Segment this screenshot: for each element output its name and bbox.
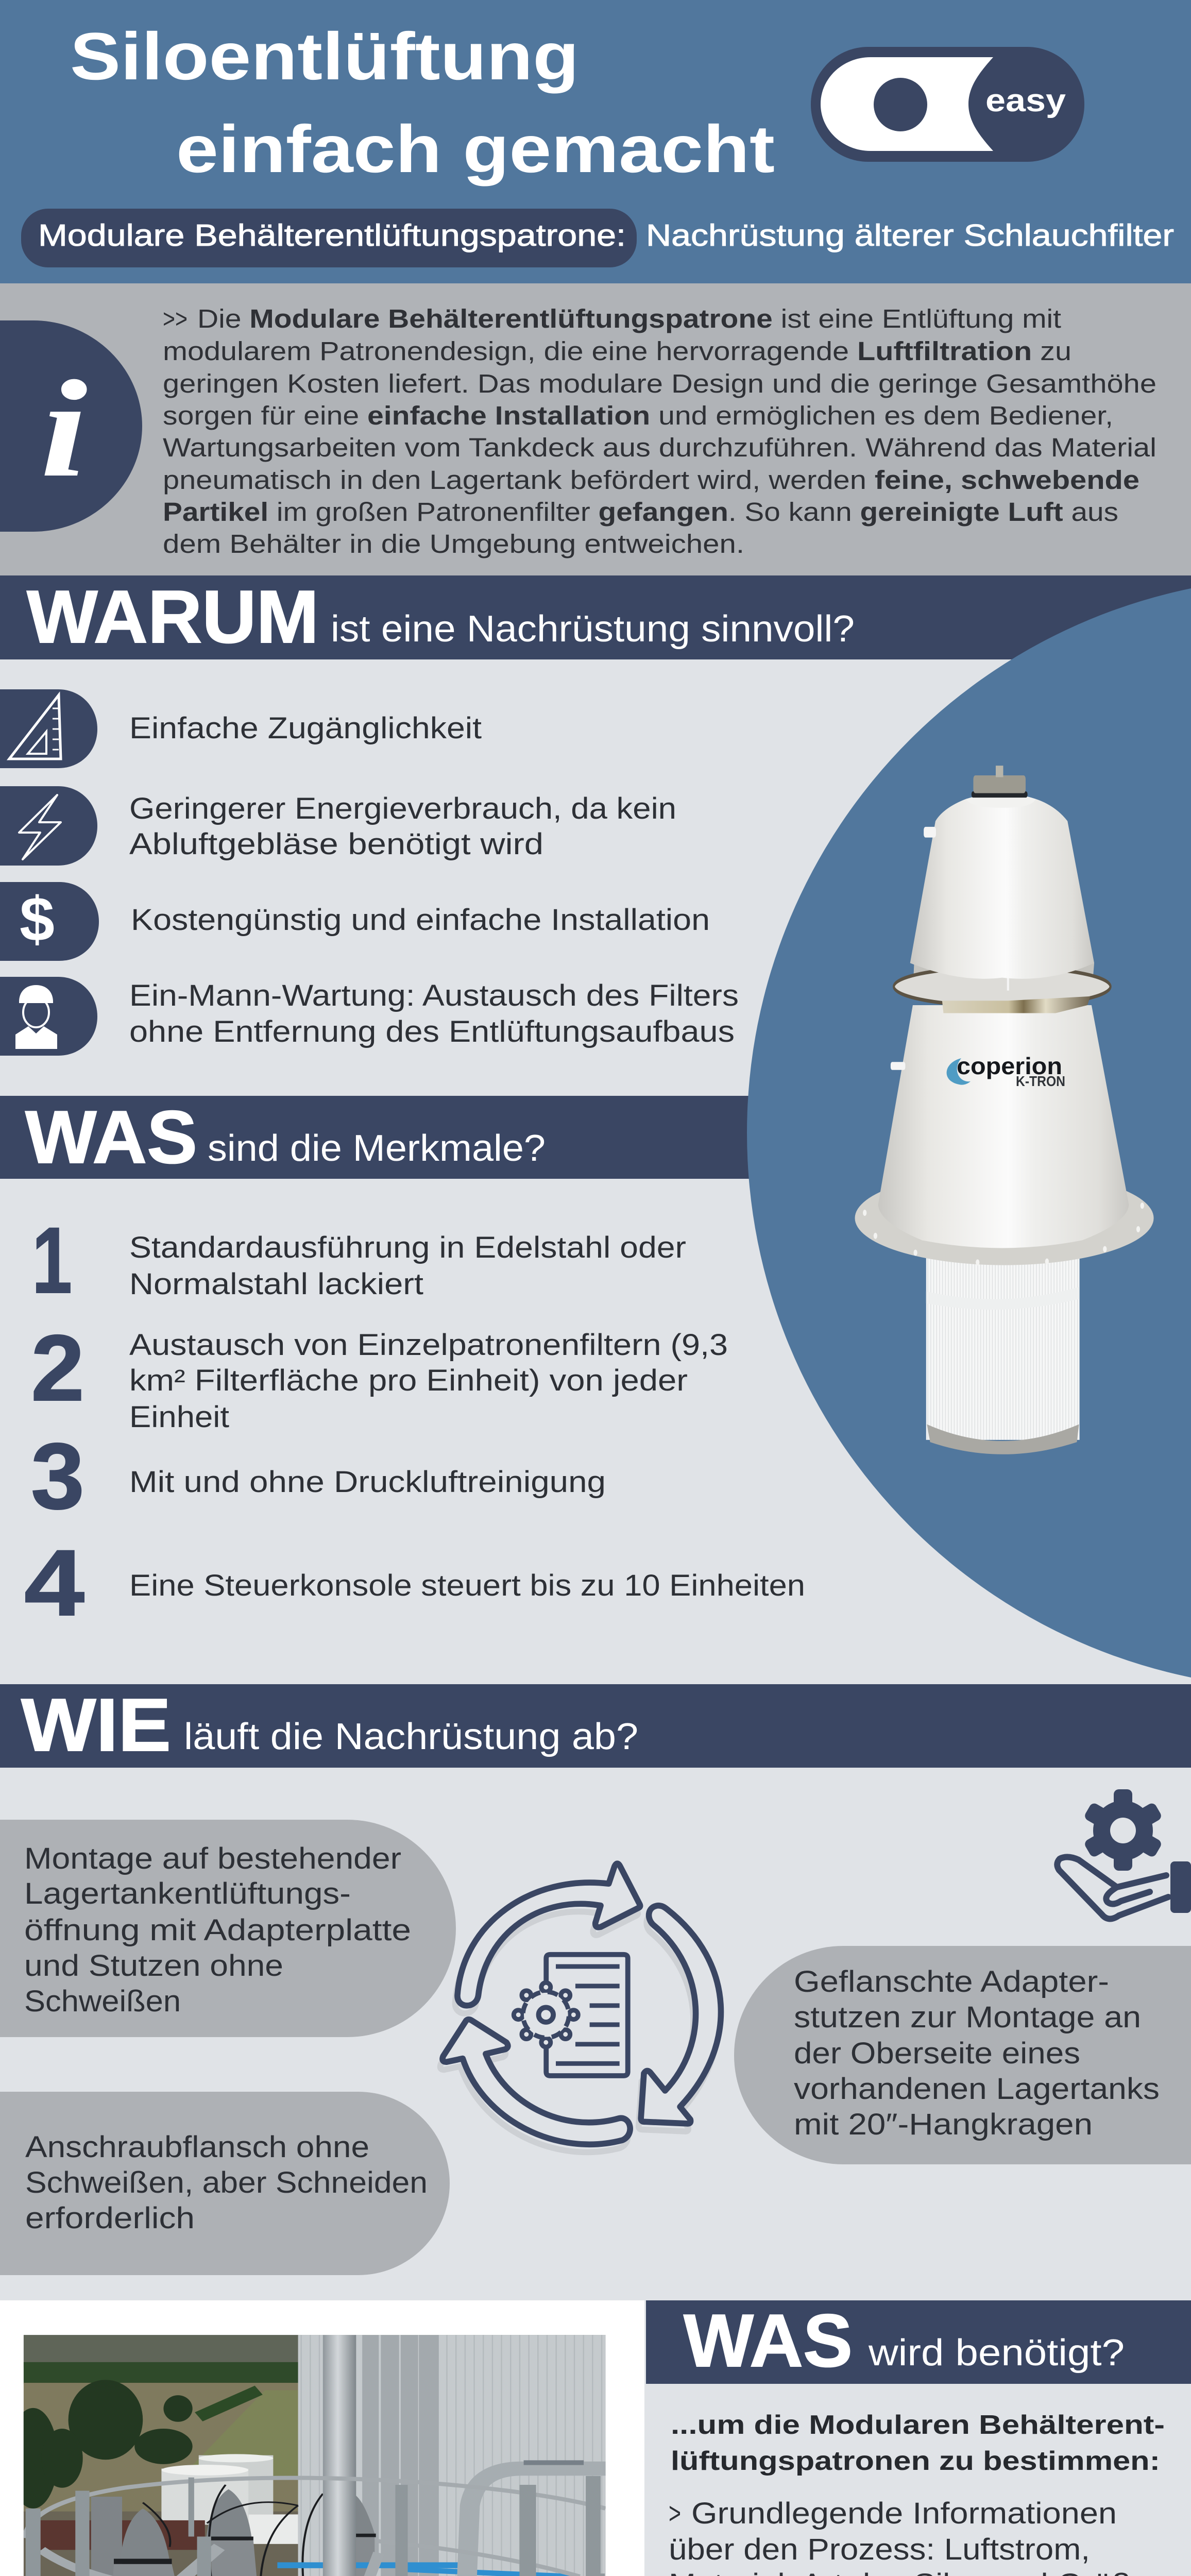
title bbox=[70, 19, 775, 187]
feature 3 bbox=[31, 1423, 606, 1529]
icon: product vent unit bbox=[855, 766, 1154, 1454]
panel: warum item 4 bbox=[0, 977, 97, 1056]
icon: easy toggle: easy bbox=[985, 83, 1066, 118]
callout: montage bbox=[0, 1820, 456, 2037]
callout: anschraubflansch bbox=[0, 2092, 450, 2275]
feature 1 bbox=[32, 1208, 686, 1313]
panel: intro background bbox=[0, 283, 1191, 576]
heading: was merkmale bbox=[0, 1095, 773, 1179]
text: warum item 4: ohne Entfernung des Entlüftungsaufbaus bbox=[129, 1015, 735, 1048]
callout: montage: Montage auf bestehender bbox=[24, 1842, 401, 1875]
text: warum item 1: Einfache Zugänglichkeit bbox=[129, 711, 482, 745]
title: einfach gemacht bbox=[176, 111, 775, 187]
callout: anschraubflansch: erforderlich bbox=[25, 2201, 195, 2235]
text block: intro: geringen Kosten liefert. Das modulare Design und die geringe Gesamthöhe bbox=[163, 369, 1156, 398]
panel: light content background bbox=[0, 575, 1191, 2302]
feature 1: Standardausführung in Edelstahl oder bbox=[129, 1231, 686, 1264]
subtitle: Modulare Behälterentlüftungspatrone: bbox=[38, 218, 626, 252]
subtitle: Nachrüstung älterer Schlauchfilter bbox=[646, 218, 1174, 252]
icon: set square bbox=[9, 695, 61, 759]
text block: requirement 1 bbox=[669, 2497, 1150, 2576]
text block: intro: dem Behälter in die Umgebung entweichen. bbox=[163, 529, 744, 558]
panel: warum item 2 bbox=[0, 786, 97, 866]
callout: montage: Schweißen bbox=[24, 1985, 181, 2018]
callout: adapterstutzen: mit 20″-Hangkragen bbox=[794, 2108, 1093, 2141]
heading: was merkmale: WAS bbox=[25, 1095, 197, 1179]
heading: was benoetigt bbox=[646, 2299, 1191, 2384]
photo: silo roof with vent units bbox=[8, 2335, 606, 2576]
feature 4 bbox=[24, 1530, 805, 1635]
feature 2: 2 bbox=[31, 1315, 84, 1420]
text block: requirements intro: ...um die Modularen Behälterent- bbox=[671, 2410, 1165, 2440]
feature 1: Normalstahl lackiert bbox=[129, 1267, 423, 1301]
text block: intro: Die Modulare Behälterentlüftungspatrone ist eine Entlüftung mit bbox=[197, 304, 1061, 333]
subtitle bbox=[21, 209, 1174, 267]
feature 3: Mit und ohne Druckluftreinigung bbox=[129, 1465, 606, 1499]
heading: was benoetigt: WAS bbox=[684, 2299, 853, 2382]
feature 4: 4 bbox=[24, 1530, 84, 1635]
text block: intro: Partikel im großen Patronenfilter gefangen . So kann gereinigte Luft aus bbox=[163, 497, 1118, 527]
panel: blue product circle bbox=[747, 577, 1191, 1689]
heading: wie: läuft die Nachrüstung ab? bbox=[184, 1716, 638, 1757]
feature 4: Eine Steuerkonsole steuert bis zu 10 Einheiten bbox=[129, 1569, 805, 1602]
icon: info bbox=[0, 320, 142, 532]
callout: adapterstutzen: vorhandenen Lagertanks bbox=[794, 2072, 1160, 2106]
feature 2: Einheit bbox=[129, 1400, 229, 1434]
text block: requirement 1: > bbox=[669, 2497, 681, 2530]
heading: was merkmale: sind die Merkmale? bbox=[208, 1128, 546, 1169]
callout: montage: öffnung mit Adapterplatte bbox=[24, 1913, 411, 1947]
text block: requirement 1: Grundlegende Informationen bbox=[691, 2497, 1117, 2530]
heading: was benoetigt: wird benötigt? bbox=[868, 2332, 1125, 2374]
heading: wie bbox=[0, 1683, 1191, 1768]
icon: info: i bbox=[40, 352, 88, 506]
text block: intro: sorgen für eine einfache Installation und ermöglichen es dem Bediener, bbox=[163, 401, 1113, 430]
icon: dollar: $ bbox=[20, 884, 55, 954]
feature 3: 3 bbox=[31, 1423, 84, 1529]
title: Siloentlüftung bbox=[70, 19, 579, 94]
callout: anschraubflansch: Schweißen, aber Schneiden bbox=[25, 2166, 428, 2199]
text block: intro: modularem Patronendesign, die eine hervorragende Luftfiltration zu bbox=[163, 336, 1071, 366]
icon: hand with gear bbox=[1057, 1789, 1191, 1919]
callout: adapterstutzen bbox=[734, 1946, 1191, 2164]
feature 1: 1 bbox=[32, 1208, 72, 1313]
panel: header background bbox=[0, 0, 1191, 284]
text: warum item 4 bbox=[129, 979, 739, 1048]
feature 2: km² Filterfläche pro Einheit) von jeder bbox=[129, 1364, 688, 1397]
text block: requirement 1: über den Prozess: Luftstrom, bbox=[669, 2533, 1090, 2566]
product logo: coperion bbox=[957, 1053, 1062, 1079]
text block: intro: pneumatisch in den Lagertank befördert wird, werden feine, schwebende bbox=[163, 465, 1139, 495]
product logo: K-TRON bbox=[1016, 1073, 1065, 1089]
text: warum item 2: Geringerer Energieverbrauch, da kein bbox=[129, 792, 676, 825]
icon: easy toggle bbox=[811, 47, 1084, 162]
icon: worker bbox=[15, 985, 57, 1049]
text: warum item 4: Ein-Mann-Wartung: Austausch des Filters bbox=[129, 979, 739, 1012]
heading: warum: ist eine Nachrüstung sinnvoll? bbox=[331, 608, 855, 650]
heading: warum bbox=[0, 575, 1191, 659]
callout: montage: und Stutzen ohne bbox=[24, 1949, 283, 1982]
callout: adapterstutzen: stutzen zur Montage an bbox=[794, 2001, 1141, 2034]
icon: cycle with gear and document bbox=[440, 1863, 721, 2152]
feature 2: Austausch von Einzelpatronenfiltern (9,3 bbox=[129, 1328, 728, 1362]
text block: intro bbox=[163, 304, 1156, 558]
text: warum item 2 bbox=[129, 792, 676, 861]
panel: requirement background bbox=[644, 2300, 1191, 2576]
callout: anschraubflansch: Anschraubflansch ohne bbox=[25, 2130, 369, 2164]
heading: wie: WIE bbox=[21, 1683, 171, 1767]
panel: white photo frame bbox=[0, 2300, 644, 2576]
text: warum item 3: Kostengünstig und einfache Installation bbox=[131, 903, 710, 937]
callout: adapterstutzen: Geflanschte Adapter- bbox=[794, 1965, 1109, 1998]
panel: warum item 1 bbox=[0, 689, 97, 768]
text: warum item 2: Abluftgebläse benötigt wird bbox=[129, 827, 543, 861]
heading: warum: WARUM bbox=[27, 575, 319, 658]
text block: requirements intro: lüftungspatronen zu bestimmen: bbox=[671, 2446, 1160, 2476]
text block: intro: >> bbox=[163, 304, 188, 333]
panel: warum item 3 bbox=[0, 882, 99, 961]
text block: requirements intro bbox=[671, 2410, 1165, 2476]
feature 2 bbox=[31, 1315, 728, 1434]
callout: montage: Lagertankentlüftungs- bbox=[24, 1877, 351, 1910]
callout: adapterstutzen: der Oberseite eines bbox=[794, 2037, 1080, 2070]
text block: intro: Wartungsarbeiten vom Tankdeck aus durchzuführen. Während das Material bbox=[163, 433, 1156, 462]
product logo bbox=[947, 1053, 1065, 1089]
icon: lightning bbox=[19, 795, 61, 859]
